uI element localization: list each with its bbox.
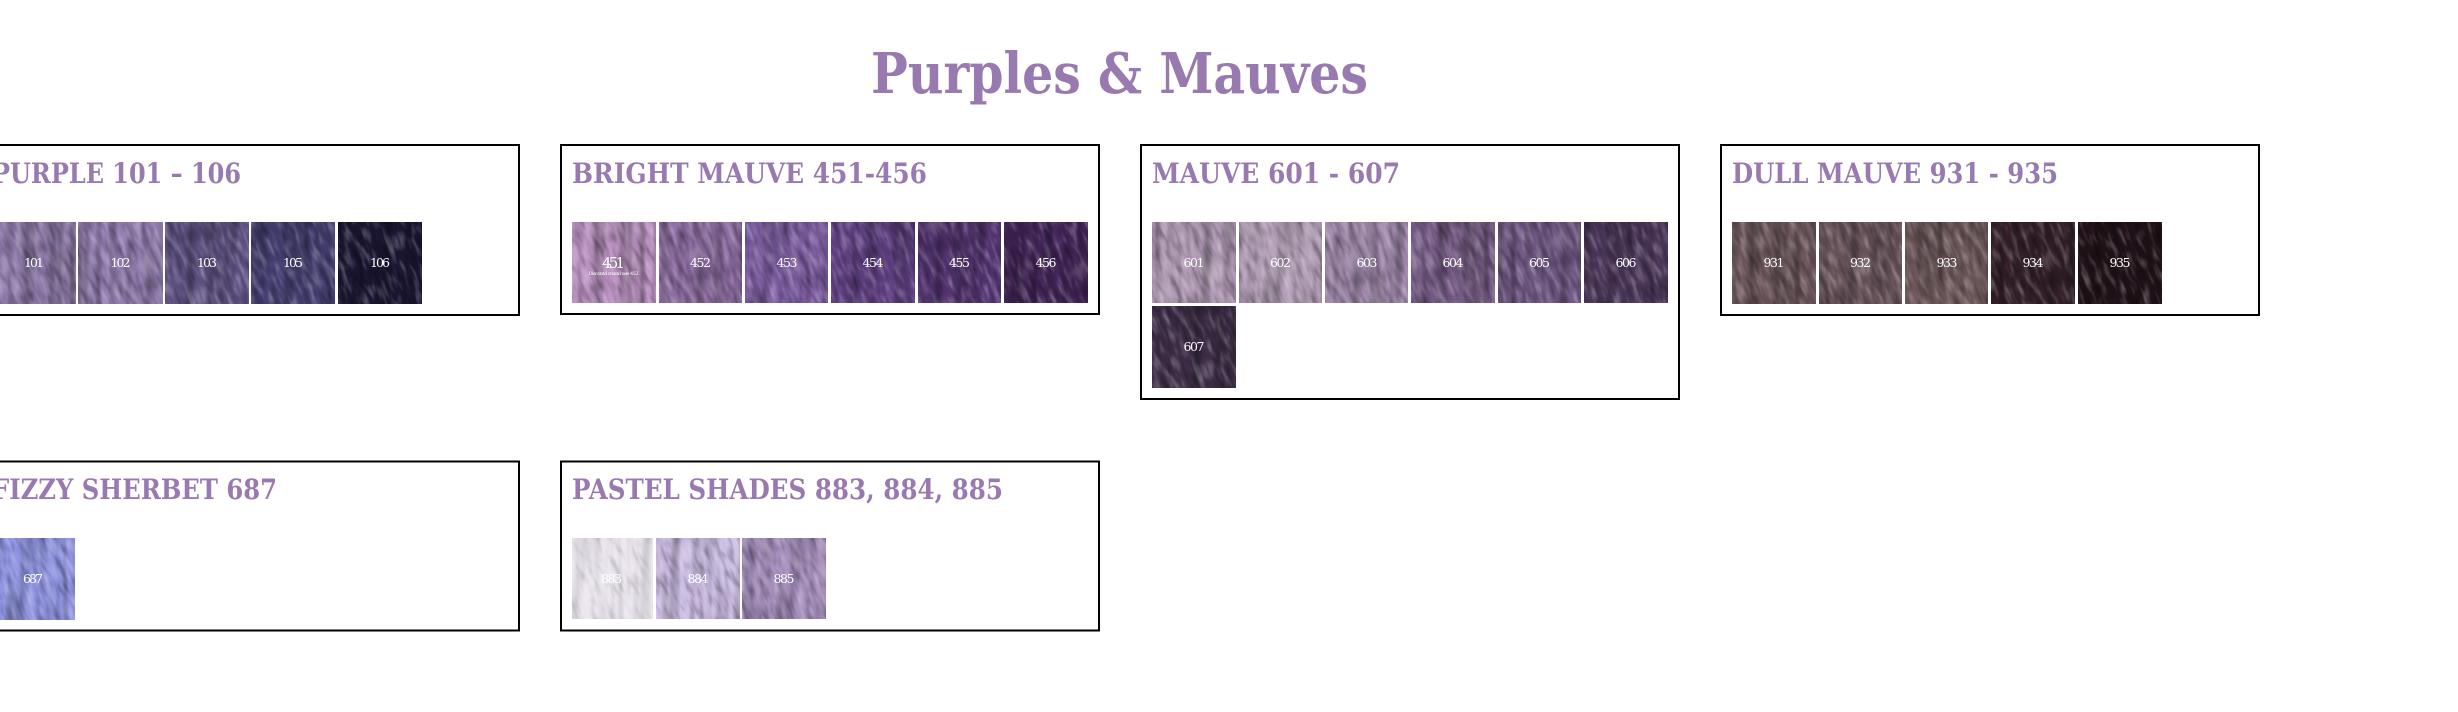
swatch 451: 451	[602, 254, 625, 272]
swatch 605: 605	[1529, 255, 1550, 270]
heading: fizzy sherbet: FIZZY SHERBET 687	[0, 473, 277, 506]
swatch 934: 934	[2022, 255, 2044, 270]
swatch 604: 604	[1442, 255, 1464, 270]
swatch 451: Discontd round use 452	[588, 271, 638, 277]
swatch 456	[865, 131, 1249, 515]
heading: purple: PURPLE 101 – 106	[0, 157, 241, 190]
swatch 102: 102	[110, 255, 130, 270]
swatch 105: 105	[283, 255, 303, 270]
swatch 452	[480, 116, 864, 500]
swatch 454: 454	[862, 255, 884, 270]
swatch 607	[978, 150, 1362, 534]
swatch 884: 884	[688, 571, 709, 586]
swatch 602	[1130, 16, 1514, 400]
swatch 883: 883	[601, 571, 622, 586]
swatch 103	[0, 76, 355, 460]
swatch 455: 455	[949, 255, 970, 270]
swatch 603: 603	[1356, 255, 1378, 270]
swatch 606: 606	[1616, 255, 1637, 270]
heading: pastel shades: PASTEL SHADES 883, 884, 885	[572, 473, 1003, 506]
swatch 687	[0, 332, 257, 712]
swatch 454	[747, 61, 1131, 445]
heading: bright mauve: BRIGHT MAUVE 451-456	[572, 157, 927, 190]
swatch 455	[719, 86, 1103, 470]
swatch 452: 452	[690, 255, 711, 270]
swatch 451	[473, 96, 857, 480]
swatch 931	[1628, 111, 2012, 495]
swatch 101	[0, 106, 287, 490]
heading: mauve: MAUVE 601 - 607	[1152, 157, 1400, 190]
swatch 934	[1832, 121, 2216, 505]
swatch 603	[1136, 121, 1520, 505]
title: Purples & Mauves	[871, 41, 1368, 107]
swatch 606	[1460, 36, 1844, 420]
swatch 885: 885	[774, 571, 794, 586]
swatch 932: 932	[1850, 255, 1871, 270]
swatch 105	[137, 41, 521, 425]
swatch 102	[0, 126, 313, 510]
swatch 605	[1344, 101, 1728, 485]
swatch 601	[988, 51, 1372, 435]
swatch 602: 602	[1270, 255, 1291, 270]
panel: fizzy sherbet 687	[0, 332, 519, 712]
swatch 933: 933	[1936, 255, 1958, 270]
swatch 601: 601	[1184, 255, 1204, 270]
swatch 456: 456	[1036, 255, 1057, 270]
panel: dull mauve 931-935	[1628, 31, 2373, 505]
panel: mauve 601-607	[978, 16, 1844, 534]
swatch 935	[1989, 31, 2373, 415]
swatch 604	[1317, 81, 1701, 465]
swatch 101: 101	[24, 255, 44, 270]
swatch 932	[1635, 46, 2019, 430]
heading: dull mauve: DULL MAUVE 931 - 935	[1732, 157, 2058, 190]
swatch 885	[643, 332, 1027, 712]
swatch 931: 931	[1764, 255, 1784, 270]
swatch 933	[1771, 71, 2155, 455]
swatch 106: 106	[370, 255, 390, 270]
panel: bright mauve 451-456	[473, 26, 1249, 515]
swatch 106	[169, 21, 553, 405]
panel: purple 101-106	[0, 21, 553, 510]
swatch 935: 935	[2110, 255, 2130, 270]
swatch 103: 103	[197, 255, 217, 270]
swatch 453	[616, 26, 1000, 410]
swatch 453: 453	[776, 255, 798, 270]
panel: pastel shades 883-885	[428, 332, 1099, 712]
swatch 687: 687	[23, 571, 43, 586]
swatch 883	[428, 332, 812, 712]
swatch 884	[457, 332, 841, 712]
swatch 607: 607	[1184, 339, 1205, 354]
